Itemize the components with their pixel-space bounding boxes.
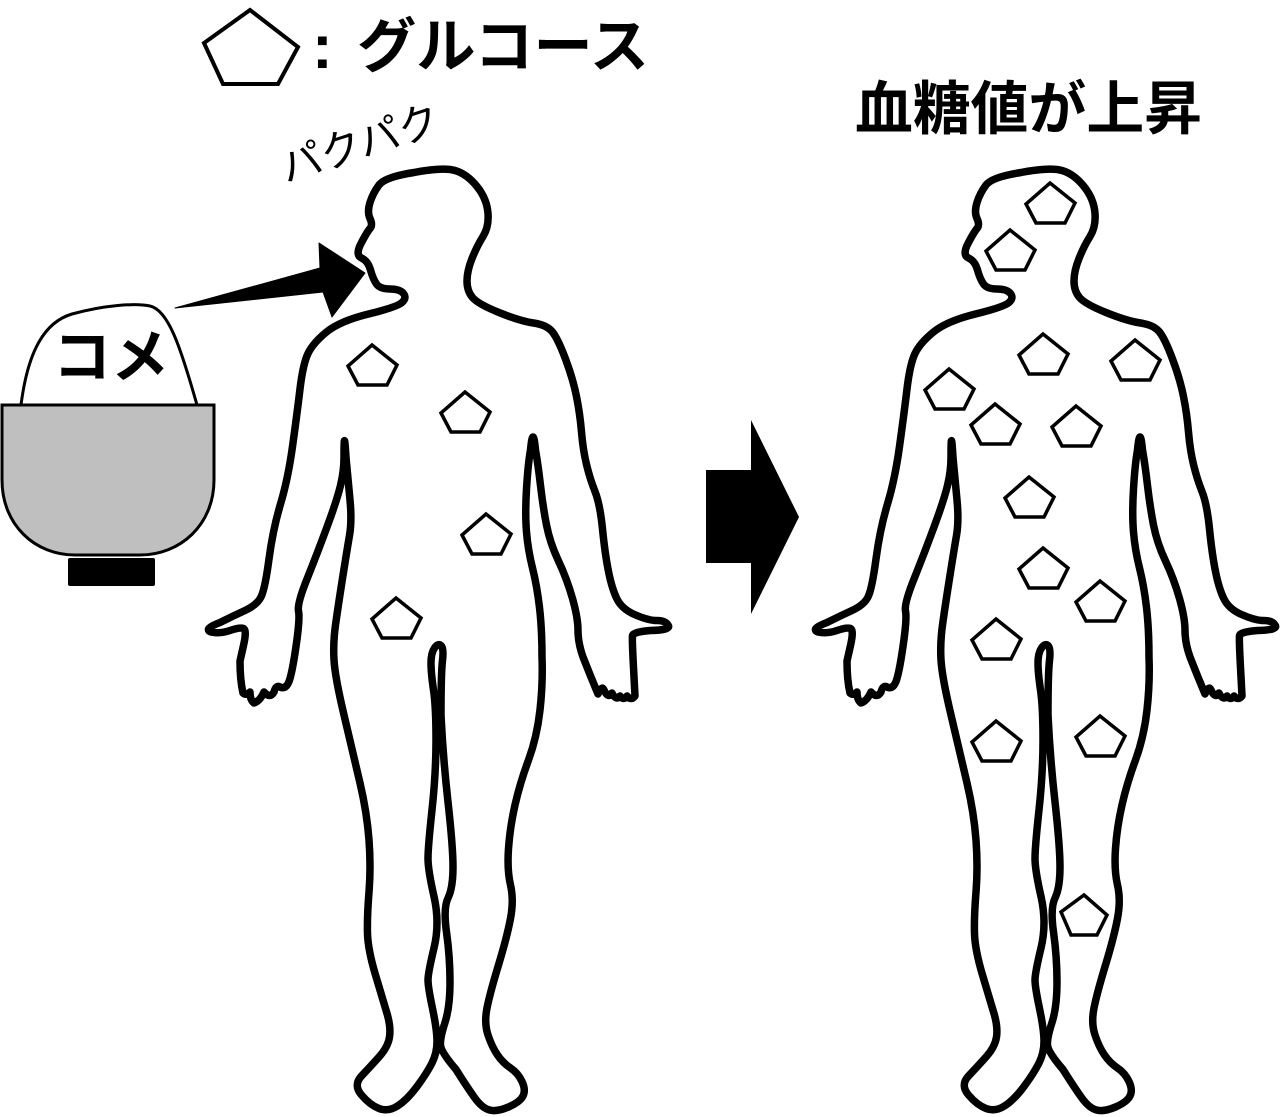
legend label: glucose: グルコース [357,14,649,80]
icon: rice bowl [2,305,214,586]
sound effect: eating: パクパク [274,96,446,192]
figure: body before eating [208,169,669,1111]
glucose pentagons in body [348,345,511,638]
legend: glucose pentagon key [204,10,649,84]
arrow: before to after [706,420,799,614]
figure: body with raised blood sugar [815,169,1276,1111]
legend colon: : [312,13,333,82]
bowl foot [68,558,155,586]
bowl body [2,405,214,555]
glucose pentagons in body [925,183,1160,935]
rice label: コメ [53,325,169,390]
body outline [815,169,1276,1111]
rice mound [21,305,197,405]
icon: legend pentagon [204,10,298,84]
heading: blood sugar rises: 血糖値が上昇 [855,77,1202,142]
arrow: rice to mouth [175,243,365,317]
body outline [208,169,669,1111]
